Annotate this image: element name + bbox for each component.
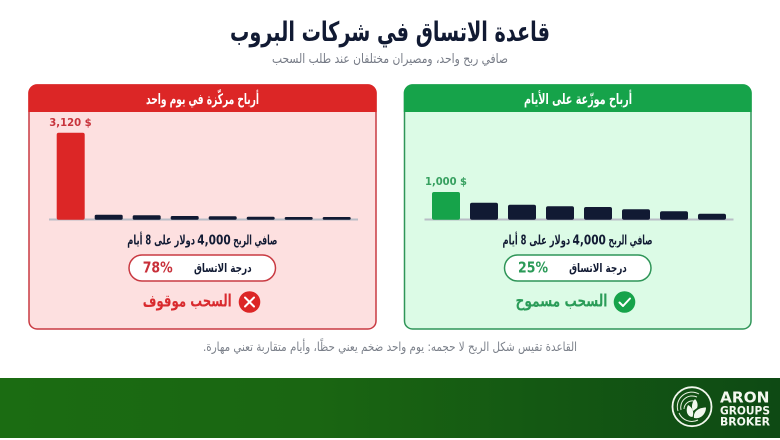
panel header: distributed: أرباح موزّعة على الأيام <box>524 90 632 108</box>
net profit text: distributed <box>502 232 652 248</box>
bar chart: concentrated: 3,120 $ <box>49 116 92 129</box>
net profit text: concentrated: 4,000 <box>197 234 231 248</box>
consistency score pill: concentrated: درجة الاتساق <box>194 261 252 275</box>
bar chart: distributed <box>424 175 734 220</box>
consistency score pill: distributed: 25% <box>518 259 548 277</box>
net profit text: concentrated: صافي الربح <box>233 234 277 248</box>
logo wordmark <box>720 389 770 428</box>
status: withdrawal stopped: السحب موقوف <box>143 292 232 312</box>
consistency score pill: distributed <box>504 255 651 281</box>
panel: distributed profits <box>404 84 752 329</box>
icon: cross <box>239 291 260 313</box>
icon: leaf emblem <box>672 387 712 426</box>
logo <box>672 387 770 428</box>
panel header: concentrated: أرباح مركّزة في يوم واحد <box>146 89 259 108</box>
logo wordmark: BROKER <box>720 414 770 428</box>
footer band <box>0 378 780 438</box>
net profit text: concentrated: دولار على 8 أيام <box>127 232 195 248</box>
bar chart: concentrated <box>49 116 358 220</box>
logo wordmark: ARON <box>720 389 770 407</box>
net profit text: distributed: 4,000 <box>572 234 606 248</box>
consistency score pill: distributed: درجة الاتساق <box>569 261 627 275</box>
footnote: القاعدة تقيس شكل الربح لا حجمه: يوم واحد ضخم يعني حظًا، وأيام متقاربة تعني مهارة. <box>203 337 577 355</box>
subtitle: صافي ربح واحد، ومصيران مختلفان عند طلب السحب <box>272 52 508 67</box>
title: قاعدة الاتساق في شركات البروب <box>230 17 550 48</box>
consistency score pill: concentrated: 78% <box>143 259 173 277</box>
icon: check <box>614 291 635 313</box>
consistency score pill: concentrated <box>129 255 276 281</box>
status: withdrawal allowed: السحب مسموح <box>516 292 608 312</box>
logo wordmark: GROUPS <box>720 404 770 418</box>
net profit text: distributed: دولار على 8 أيام <box>502 232 570 248</box>
panel: concentrated profits <box>28 84 377 329</box>
bar chart: distributed: 1,000 $ <box>425 175 467 188</box>
net profit text: concentrated <box>127 232 277 248</box>
panel header: concentrated <box>28 84 377 112</box>
net profit text: distributed: صافي الربح <box>608 234 652 248</box>
panel header: distributed <box>404 84 752 112</box>
